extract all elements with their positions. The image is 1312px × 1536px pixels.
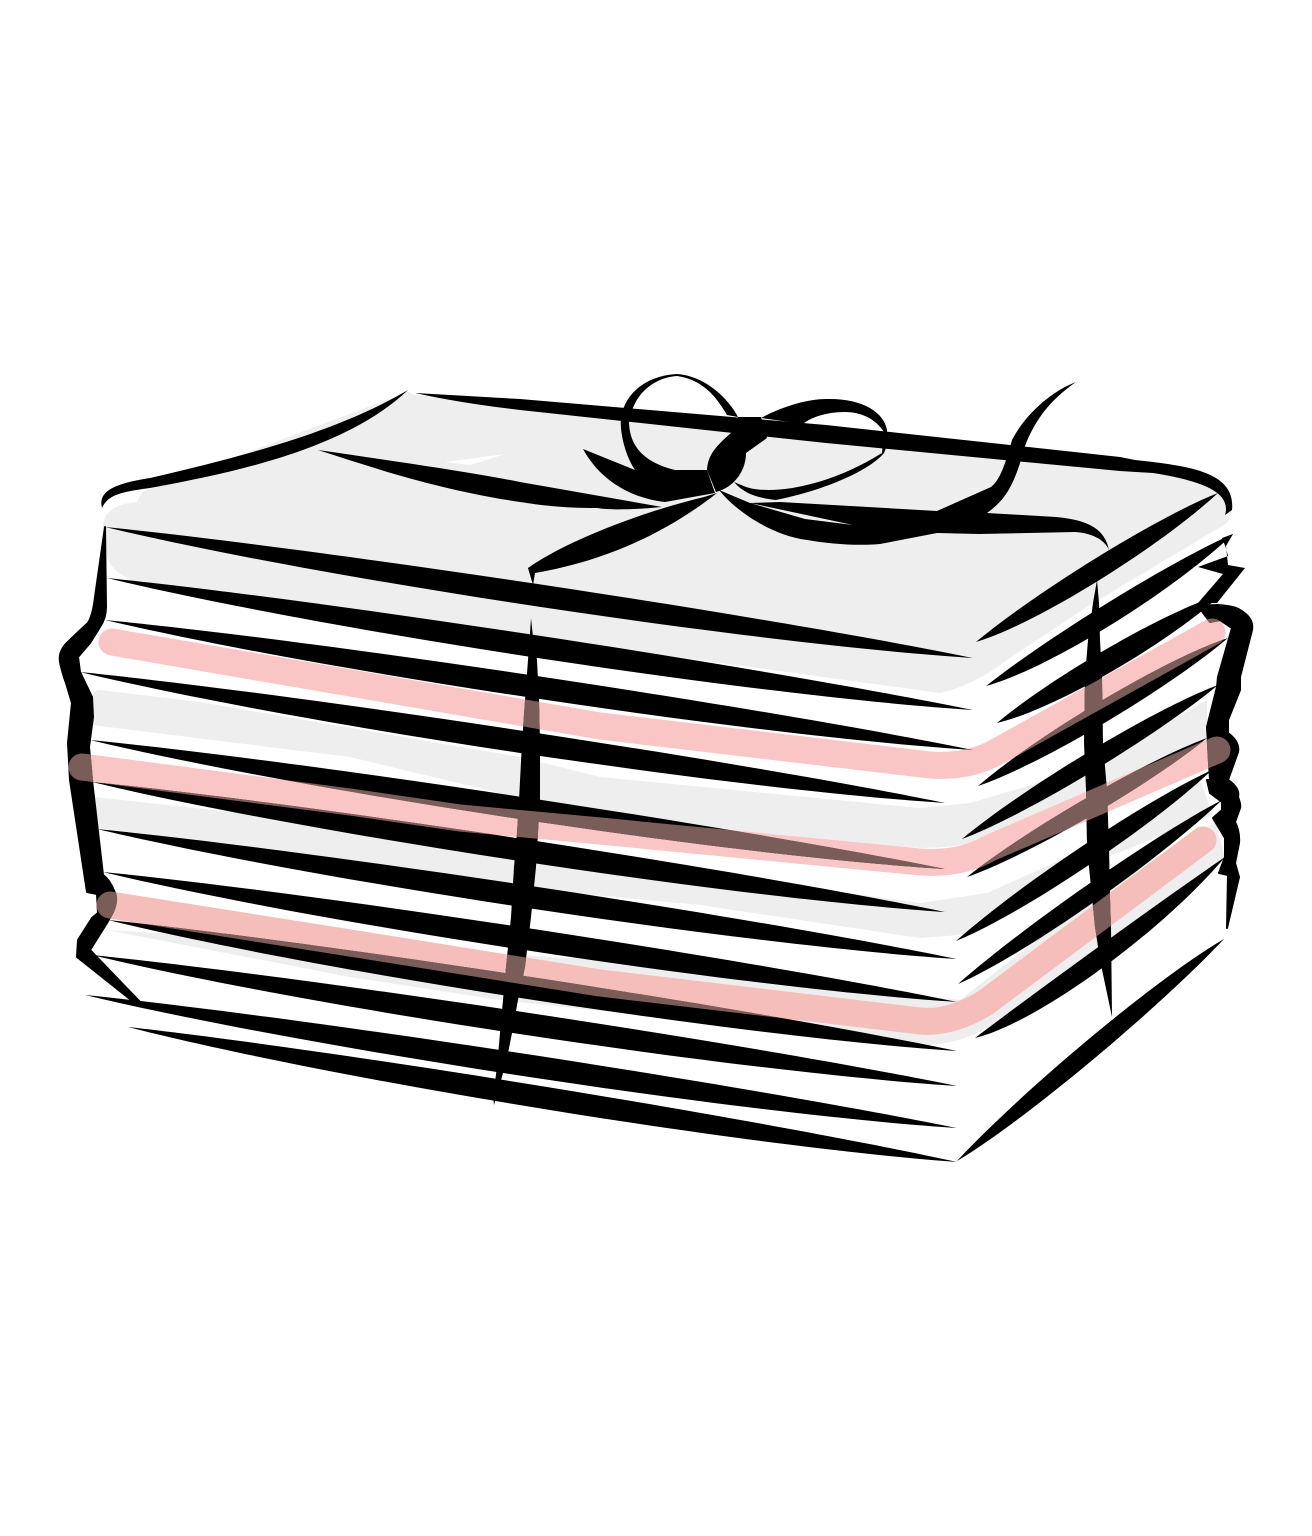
bow bbox=[583, 374, 1109, 550]
pink ribbon bands bbox=[82, 632, 1217, 1021]
left outline of the stack bbox=[60, 527, 140, 1003]
ribbon shadows where pink crosses black bbox=[82, 632, 1217, 1021]
right outline of the stack bbox=[1198, 605, 1252, 928]
vertical ribbon: side bbox=[1084, 580, 1112, 1017]
front edges of the paper sheets bbox=[80, 527, 973, 1162]
bow: right loop bbox=[734, 399, 887, 500]
vertical ribbon: front bbox=[493, 618, 540, 1105]
bow: right tail bbox=[719, 382, 1109, 550]
jagged sheet corner, top right bbox=[1198, 534, 1245, 603]
ribbon tail to the front bbox=[528, 493, 717, 585]
bow: knot bbox=[707, 417, 767, 492]
top left ribbon edge bbox=[101, 390, 408, 508]
long top ribbon band bbox=[415, 393, 1232, 515]
grey paper fills bbox=[92, 392, 1232, 1045]
bow: left loop bbox=[583, 374, 738, 502]
side edges of the paper sheets bbox=[956, 493, 1233, 1161]
ribbon from left to the knot bbox=[318, 450, 662, 509]
